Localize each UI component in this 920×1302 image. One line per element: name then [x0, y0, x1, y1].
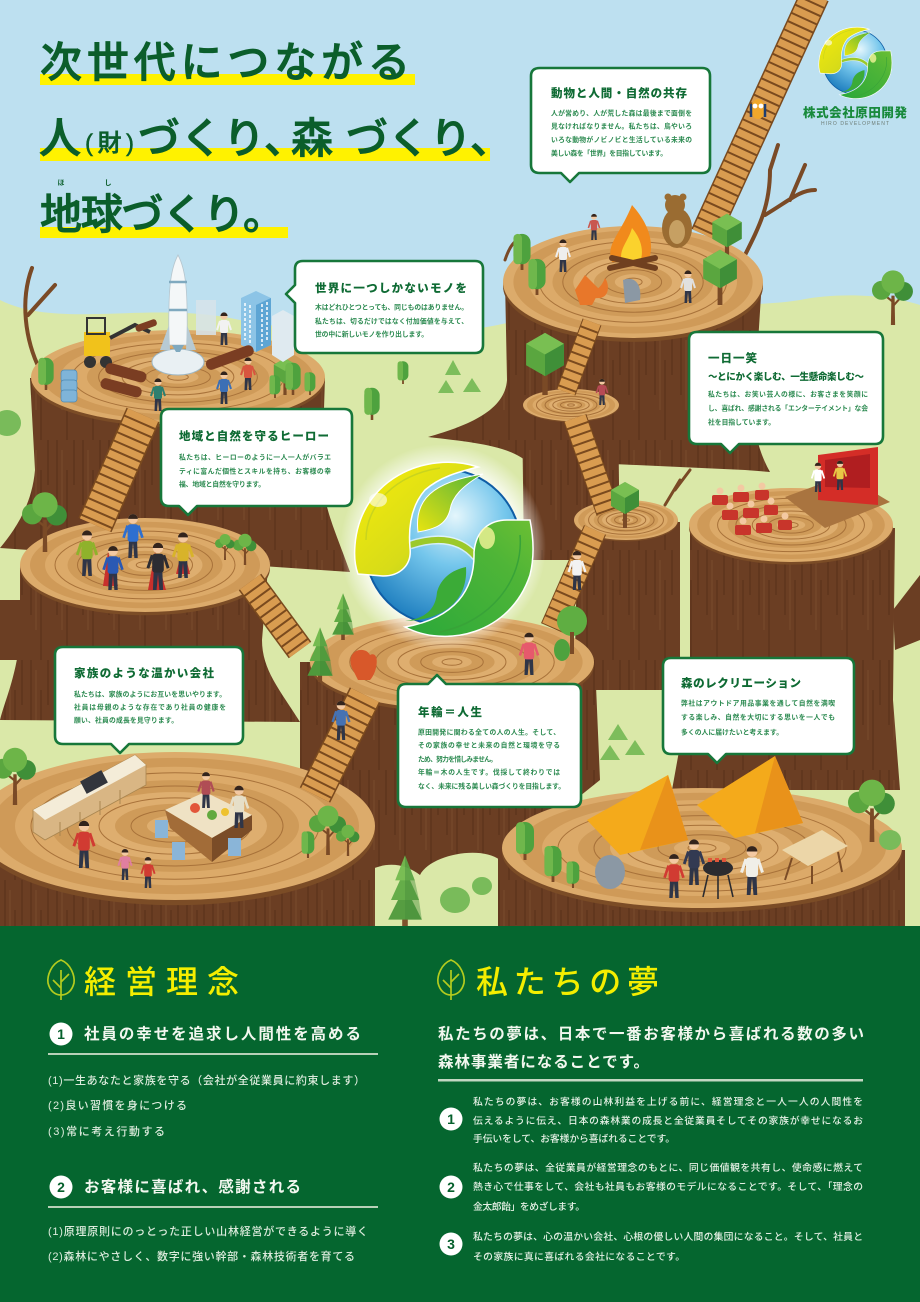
title: ほ: [58, 179, 64, 187]
callout: warm family company: 社員は母親のような存在であり社員の健康を: [74, 702, 226, 712]
sky background: [0, 0, 920, 930]
callout: one smile a day: し、喜ばれ、感謝される「エンターテイメント」な会: [708, 404, 868, 412]
callout: annual rings equal life: なく、未来に残る美しい森づくりを目指します。: [418, 782, 565, 790]
callout: coexistence: 人が営めり、人が荒した森は最後まで面倒を: [551, 108, 692, 118]
scene: theatre stage and audience: [712, 447, 890, 535]
principle 2: お客様に喜ばれ、感謝される: [84, 1177, 301, 1196]
title: し: [104, 179, 112, 187]
small characters: [333, 379, 608, 740]
dream 3: 私たちの夢は、心の温かい会社、心根の優しい人間の集団になること。そして、社員と: [473, 1230, 863, 1243]
forest scene: [0, 0, 920, 930]
staircases: [95, 0, 815, 795]
icon: tree leaf: [438, 960, 464, 1000]
callout: annual rings equal life: 年輪＝木の人生です。伐採して終わりでは: [418, 768, 560, 776]
callout: one smile a day: [689, 332, 883, 453]
kitchen counter: [33, 755, 146, 840]
dream 1: 私たちの夢は、お客様の山林利益を上げる前に、経営理念と一人一人の人間性を: [473, 1095, 863, 1108]
callout: local heroes: [161, 409, 352, 515]
buildings: [196, 291, 294, 362]
principle 1: (1)一生あなたと家族を守る（会社が全従業員に約束します）: [48, 1073, 365, 1087]
icon: tree leaf: [48, 960, 74, 1000]
title: [39, 39, 512, 238]
stump: small centre right: [522, 389, 620, 560]
callout: forest recreation: [663, 658, 854, 763]
principle 1: (3)常に考え行動する: [48, 1124, 165, 1138]
callout: coexistence: 動物と人間・自然の共存: [551, 86, 688, 100]
dream 2: 私たちの夢は、全従業員が経営理念のもとに、同じ価値観を共有し、使命感に燃えて: [473, 1161, 863, 1174]
callout: warm family company: [55, 647, 243, 753]
title: (財): [85, 130, 134, 157]
callout: one smile a day: ～とにかく楽しむ、一生懸命楽しむ～: [708, 371, 864, 383]
heading: 経営理念: [84, 964, 239, 1000]
principle 1: [48, 1022, 378, 1138]
callout: warm family company: 願い、社員の成長を見守ります。: [74, 716, 178, 724]
callout: warm family company: 私たちは、家族のようにお互いを思いやります。: [74, 690, 226, 698]
logs: [99, 344, 255, 399]
company logo: [803, 27, 907, 127]
callout: one smile a day: 私たちは、お笑い芸人の様に、お客さまを笑顔に: [708, 390, 868, 398]
dream 3: その家族に真に喜ばれる会社になることです。: [473, 1250, 685, 1263]
dining table: [165, 792, 252, 862]
title highlight bars: [40, 74, 490, 238]
panel: our dream: [438, 960, 864, 1263]
callout: coexistence: [531, 68, 710, 182]
callout: coexistence: 見なければなりません。私たちは、鳥やいろ: [551, 122, 692, 130]
trees and bushes: [0, 214, 913, 928]
excavator: [84, 318, 158, 368]
dream 2: 熱き心で仕事をして、会社も社員もお客様のモデルになることです。そして、「理念の: [473, 1180, 863, 1193]
campfire: [610, 205, 655, 268]
owl: [751, 99, 765, 119]
callout: annual rings equal life: [398, 675, 581, 807]
lead statement: [438, 1024, 864, 1082]
dream 3: [440, 1230, 863, 1263]
stump: top left: [0, 330, 350, 572]
dream 1: 1: [447, 1111, 455, 1127]
dream 2: 2: [447, 1179, 455, 1195]
tents: [587, 756, 803, 855]
principle 1: 1: [57, 1026, 65, 1042]
principle 2: [48, 1176, 378, 1263]
scene: campfire and animals: [556, 99, 765, 305]
callout: forest recreation: 弊社はアウトドア用品事業を通して自然を満喫: [681, 698, 835, 708]
callout: one of a kind: 私たちは、切るだけではなく付加価値を与えて、: [315, 316, 468, 326]
callout: annual rings equal life: 年輪＝人生: [418, 705, 482, 719]
callout: one of a kind: 木はどれひとつとっても、同じものはありません。: [315, 302, 468, 312]
callout: one smile a day: 社を目指しています。: [708, 418, 775, 426]
callout: one of a kind: 世の中に新しいモノを作り出します。: [315, 330, 428, 338]
principle 2: (2)森林にやさしく、数字に強い幹部・森林技術者を育てる: [48, 1249, 355, 1263]
company logo: HIRO DEVELOPMENT: [821, 121, 889, 127]
title: づくり、: [138, 115, 306, 162]
callout: annual rings equal life: その家族の幸せと未来の自然と環境を守る: [418, 740, 560, 750]
dream 1: [440, 1095, 863, 1145]
stump: right theatre: [672, 488, 920, 790]
company logo: 株式会社原田開発: [803, 105, 907, 120]
callout: one of a kind: [286, 261, 483, 353]
callout: local heroes: 地域と自然を守るヒーロー: [179, 429, 329, 443]
stump: top right: [428, 226, 770, 472]
lead statement: 私たちの夢は、日本で一番お客様から喜ばれる数の多い: [438, 1024, 864, 1043]
scene: rocket, machinery and city: [61, 255, 294, 411]
title: 次世代につながる: [40, 39, 410, 86]
branches: [25, 145, 815, 505]
stump: bottom left: [0, 752, 375, 930]
lead statement: 森林事業者になることです。: [438, 1052, 649, 1071]
title: 人: [39, 115, 81, 162]
stump: centre: [300, 615, 600, 885]
stump: mid left: [0, 518, 300, 722]
principle 1: 社員の幸せを追求し人間性を高める: [84, 1024, 361, 1043]
dream 1: 手伝いをして、お客様から喜ばれることです。: [473, 1132, 675, 1145]
title: 森: [291, 115, 333, 162]
callout: local heroes: 福、地域と自然を守ります。: [179, 480, 265, 488]
callout: coexistence: 美しい森を「世界」を目指しています。: [551, 148, 667, 158]
callout: local heroes: ティに富んだ個性とスキルを持ち、お客様の幸: [179, 466, 331, 476]
principle 1: (2)良い習慣を身につける: [48, 1098, 187, 1112]
raccoon: [623, 279, 640, 303]
chairs: [155, 820, 241, 860]
dream 1: 伝えるように伝え、日本の森林業の成長と全従業員そしてその家族が幸せになるお: [473, 1114, 863, 1127]
squirrel: [351, 650, 377, 680]
bear: [662, 194, 692, 248]
barrels: [61, 370, 77, 402]
rocket: [152, 255, 204, 375]
dream 3: 3: [447, 1236, 455, 1252]
raccoon: [595, 855, 625, 889]
scene: family kitchen: [33, 755, 252, 888]
dream 2: 金太郎飴」をめざします。: [473, 1200, 585, 1213]
stump: mid right: [574, 500, 680, 690]
callout: one smile a day: 一日一笑: [708, 351, 758, 365]
callout: forest recreation: 多くの人に届けたいと考えます。: [681, 728, 783, 736]
scene: camping: [587, 756, 848, 899]
audience: [712, 490, 792, 535]
principle 2: (1)原理原則にのっとった正しい山林経営ができるように導く: [48, 1224, 368, 1238]
callout: warm family company: 家族のような温かい会社: [74, 666, 214, 680]
callout: local heroes: 私たちは、ヒーローのように一人一人がバラエ: [179, 452, 331, 462]
callout: annual rings equal life: 原田開発に関わる全ての人の人生。そして、: [418, 728, 560, 736]
meadow hills: [0, 295, 920, 930]
callout: forest recreation: 森のレクリエーション: [681, 676, 801, 690]
title: づくり、: [346, 115, 512, 162]
panel: management philosophy: [48, 960, 378, 1263]
scene: superheroes: [77, 514, 193, 590]
footer panel: [0, 926, 920, 1302]
heading: 私たちの夢: [476, 964, 659, 1000]
stump: bottom right: [498, 788, 905, 930]
fox: [575, 275, 608, 305]
central globe logo: [340, 444, 546, 650]
dream 2: [440, 1161, 863, 1213]
callout: forest recreation: する楽しみ、自然を大切にする思いを一人でも: [681, 712, 835, 722]
callout: one of a kind: 世界に一つしかないモノを: [315, 281, 467, 295]
callout: annual rings equal life: ため、努力を惜しみません。: [418, 754, 497, 764]
callout: coexistence: いろな動物がノビノビと生活している未来の: [551, 135, 692, 144]
title: 地球づくり。: [40, 191, 285, 238]
stage: [785, 447, 890, 528]
principle 2: 2: [57, 1179, 65, 1195]
barbecue grill: [703, 860, 733, 899]
camp table: [782, 830, 848, 884]
